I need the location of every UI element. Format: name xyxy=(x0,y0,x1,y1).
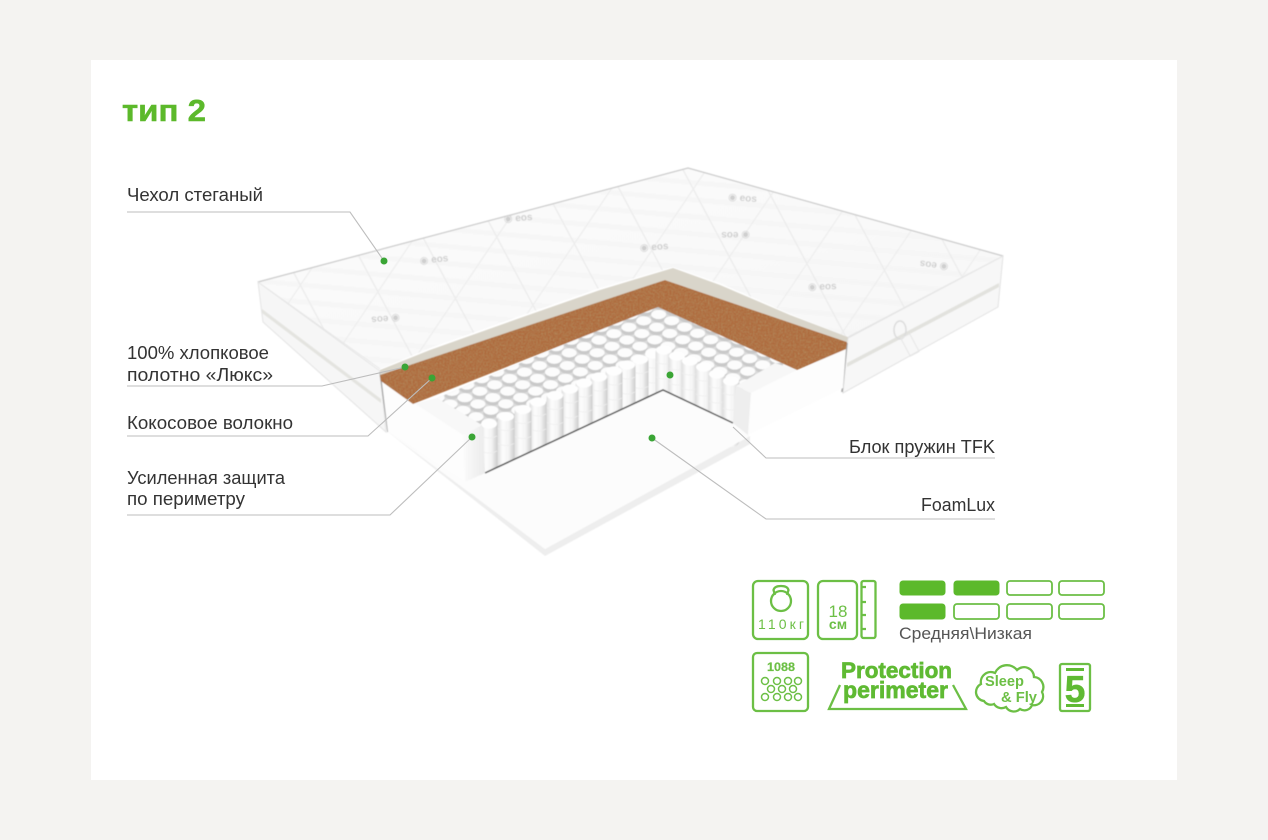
callout: foam xyxy=(648,434,995,519)
icon: 5 year warranty xyxy=(1060,664,1090,711)
icon: 1088 springs: 1088 xyxy=(767,660,795,674)
coconut fibre layer xyxy=(380,280,847,404)
callout: perimeter: Усиленная защита xyxy=(127,468,286,488)
callout: cotton: полотно «Люкс» xyxy=(127,365,273,385)
callout: cover xyxy=(127,185,388,264)
left perimeter foam xyxy=(382,378,485,482)
quilted top cover xyxy=(258,168,1003,369)
right perimeter foam xyxy=(733,346,846,435)
cover logos xyxy=(370,192,949,325)
foam base floor xyxy=(388,390,750,549)
white panel xyxy=(91,60,1177,780)
icon: height 18 cm: см xyxy=(829,616,847,632)
cover logos: ◉ eos xyxy=(721,229,750,240)
spring cylinders, long row xyxy=(480,349,662,490)
floor shadow edge xyxy=(485,390,733,473)
callout: cotton: 100% хлопковое xyxy=(127,343,269,363)
callout: coconut: Кокосовое волокно xyxy=(127,413,293,433)
cover logos: ◉ eos xyxy=(639,241,669,254)
callout: perimeter: по периметру xyxy=(127,489,245,509)
icon: protection perimeter xyxy=(829,658,966,709)
icon: 5 year warranty: 5 xyxy=(1065,669,1085,710)
spring cylinders, short row xyxy=(656,345,740,447)
icon: height 18 cm: 18 xyxy=(829,602,847,621)
icon: weight 110 kg xyxy=(753,581,808,639)
right side of mattress xyxy=(842,256,1003,393)
callout: foam: FoamLux xyxy=(921,495,995,515)
icon: height 18 cm xyxy=(818,581,876,639)
cover logos: ◉ eos xyxy=(503,212,533,225)
icon: protection perimeter: Protection xyxy=(841,658,952,683)
firmness scale xyxy=(899,581,1104,643)
callout: spring block xyxy=(666,372,995,458)
firmness scale: Средняя\Низкая xyxy=(899,624,1032,643)
callout: cotton xyxy=(127,343,408,386)
icon: protection perimeter: perimeter xyxy=(843,677,948,703)
cover logos: ◉ eos xyxy=(419,253,449,267)
icon: sleep and fly cloud: & Fly xyxy=(1001,689,1038,706)
icon: sleep and fly cloud: Sleep xyxy=(985,673,1024,690)
callout: perimeter xyxy=(127,434,476,515)
cover logos: ◉ eos xyxy=(728,192,758,205)
inner wall behind springs xyxy=(470,342,745,474)
spring bed background xyxy=(428,305,792,428)
cover logos: ◉ eos xyxy=(919,257,949,272)
icon: weight 110 kg: 110кг xyxy=(758,616,804,632)
cotton layer xyxy=(380,268,848,375)
spring tops xyxy=(438,307,792,424)
callout: cover: Чехол стеганый xyxy=(127,185,263,205)
mattress cutaway illustration xyxy=(258,168,1003,556)
title: тип 2 xyxy=(122,93,206,128)
callout: spring block: Блок пружин TFK xyxy=(849,437,995,457)
icon: 1088 springs xyxy=(753,653,808,711)
left side of mattress xyxy=(258,282,388,432)
cover logos: ◉ eos xyxy=(370,312,400,325)
cover logos: ◉ eos xyxy=(808,281,837,293)
bottom foam layer xyxy=(388,390,750,556)
icon: sleep and fly cloud xyxy=(976,665,1043,711)
callout: coconut xyxy=(127,374,436,436)
